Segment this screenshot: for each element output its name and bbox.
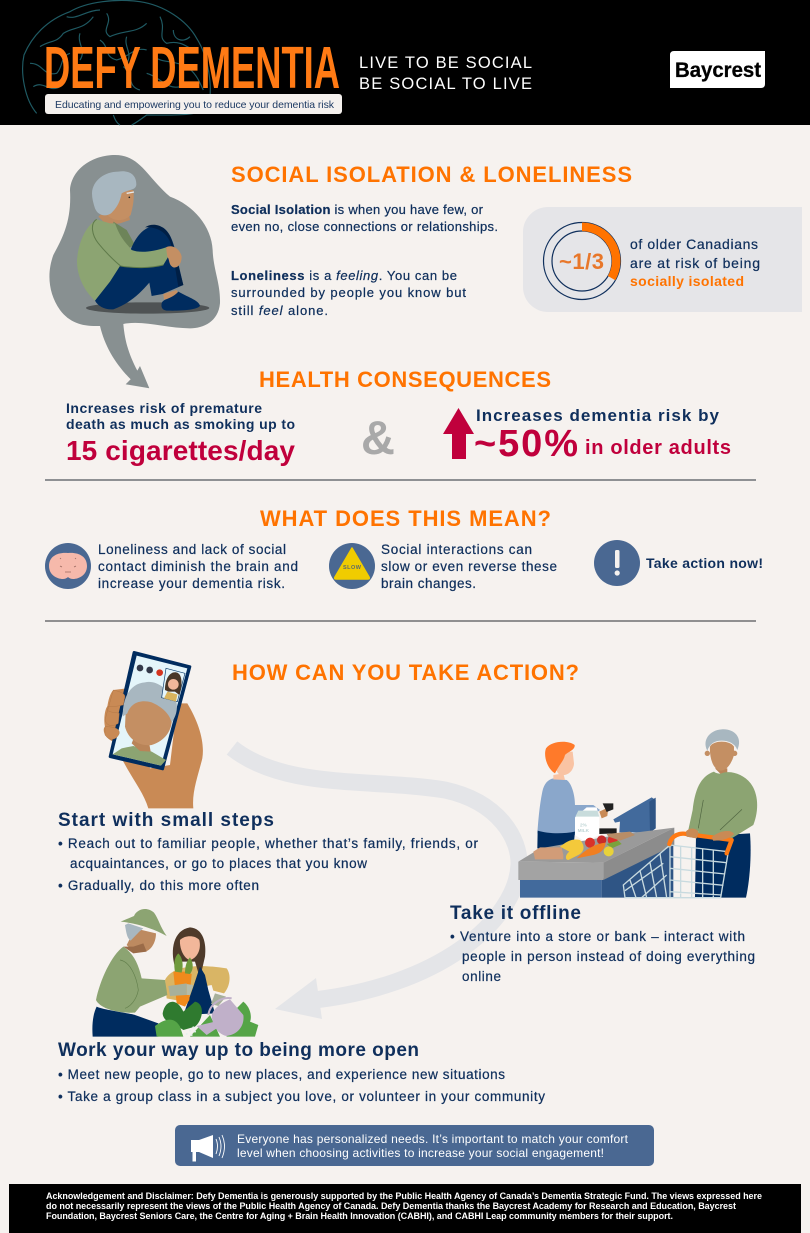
step 1: start with small steps: Start with small steps	[58, 810, 274, 831]
icon: slow sign: SLOW	[343, 565, 362, 571]
meaning 3	[594, 540, 763, 586]
step 2: take it offline: • Venture into a store or bank – interact with	[450, 929, 745, 944]
donut: one third: ~1/3	[559, 249, 604, 274]
step 3: work your way up: • Meet new people, go to new places, and experience new situations	[58, 1067, 505, 1082]
definitions text: surrounded by people you know but	[231, 285, 466, 300]
consequence: premature death: 15 cigarettes/day	[66, 435, 295, 466]
icon: exclamation	[594, 540, 640, 586]
text: Social interactions can	[381, 542, 532, 557]
slogan: LIVE TO BE SOCIAL	[359, 54, 532, 72]
footer: acknowledgement and disclaimer: do not necessarily represent the views of the Public Health Agency of Canada. Defy Dementia thanks the Baycrest Academy for Research and Education, Baycrest	[46, 1201, 736, 1211]
step 2: take it offline: people in person instead of doing everything	[462, 949, 755, 964]
header band	[0, 0, 810, 125]
panel: one third statistic	[523, 207, 802, 312]
arrow: path between steps	[232, 748, 519, 1019]
text	[381, 542, 557, 591]
ampersand: &	[361, 411, 395, 464]
consequence: dementia risk: ~50%	[474, 423, 578, 465]
footer: acknowledgement and disclaimer: Acknowledgement and Disclaimer: Defy Dementia is generously supported by the Public Health Agency of Canada’s Dementia Strategic Fund. The views expressed here	[46, 1191, 762, 1201]
text	[98, 542, 298, 591]
step 2: take it offline	[450, 903, 755, 984]
text: Loneliness and lack of social	[98, 542, 286, 557]
consequence: premature death: Increases risk of premature	[66, 400, 262, 416]
statistic text	[630, 236, 760, 289]
slogan	[359, 54, 532, 93]
slogan: BE SOCIAL TO LIVE	[359, 75, 532, 93]
step 3: work your way up: Work your way up to being more open	[58, 1040, 419, 1061]
consequence: premature death	[66, 400, 295, 466]
title: DEFY DEMENTIA	[44, 35, 340, 101]
icon: brain outline	[23, 0, 210, 125]
illustration: checkout at store	[518, 729, 757, 898]
callout text: level when choosing activities to increase your social engagement!	[237, 1146, 604, 1160]
text: contact diminish the brain and	[98, 559, 298, 574]
heading: health consequences: HEALTH CONSEQUENCES	[259, 367, 551, 392]
consequence: premature death: death as much as smoking up to	[66, 416, 295, 432]
step 3: work your way up	[58, 1040, 545, 1104]
meaning 1	[45, 542, 298, 591]
step 1: start with small steps: acquaintances, or go to places that you know	[70, 856, 367, 871]
heading: how can you take action: HOW CAN YOU TAKE ACTION?	[232, 660, 579, 685]
illustration: isolated person in grey blob with arrow	[49, 155, 220, 388]
text: increase your dementia risk.	[98, 576, 285, 591]
statistic text: of older Canadians	[630, 236, 758, 252]
icon: megaphone	[191, 1135, 224, 1162]
tagline pill	[45, 94, 342, 114]
text: Take action now!	[646, 555, 763, 571]
illustration: gardening together	[92, 909, 258, 1037]
text: brain changes.	[381, 576, 476, 591]
icon: up arrow	[443, 408, 474, 459]
illustration: checkout at store: MILK	[578, 828, 590, 833]
heading: what does this mean: WHAT DOES THIS MEAN?	[260, 506, 551, 531]
icon: brain	[45, 543, 91, 589]
icon: slow sign	[329, 543, 375, 589]
footer: acknowledgement and disclaimer: Foundation, Baycrest Seniors Care, the Centre for Aging + Brain Health Innovation (CABHI), and CABHI Leap community members for their support.	[46, 1211, 673, 1221]
consequence: dementia risk: in older adults	[585, 437, 731, 459]
illustration: video call on phone	[104, 652, 203, 808]
step 3: work your way up: • Take a group class in a subject you love, or volunteer in your community	[58, 1089, 545, 1104]
statistic text: socially isolated	[630, 273, 744, 289]
callout text	[237, 1132, 629, 1160]
footer: acknowledgement and disclaimer	[9, 1184, 801, 1233]
statistic text: are at risk of being	[630, 255, 760, 271]
meaning 2	[329, 542, 557, 591]
tagline pill: Educating and empowering you to reduce your dementia risk	[55, 99, 335, 111]
text: slow or even reverse these	[381, 559, 557, 574]
step 1: start with small steps	[58, 810, 478, 893]
Baycrest logo: Baycrest	[675, 58, 761, 82]
consequence: dementia risk	[474, 406, 731, 465]
step 1: start with small steps: • Reach out to familiar people, whether that’s family, friends, or	[58, 836, 478, 851]
step 2: take it offline: Take it offline	[450, 903, 581, 924]
definitions text	[231, 202, 498, 318]
definitions text: even no, close connections or relationships.	[231, 219, 498, 234]
definitions text: still feel alone.	[231, 303, 328, 318]
step 1: start with small steps: • Gradually, do this more often	[58, 878, 259, 893]
definitions text: Social Isolation is when you have few, or	[231, 202, 484, 217]
donut: one third	[544, 222, 620, 300]
definitions text: Loneliness is a feeling. You can be	[231, 268, 457, 283]
Baycrest logo	[670, 51, 765, 88]
consequence: dementia risk: Increases dementia risk by	[476, 406, 720, 425]
step 2: take it offline: online	[462, 969, 501, 984]
callout: personalized needs	[175, 1125, 654, 1166]
heading: social isolation and loneliness: SOCIAL ISOLATION & LONELINESS	[231, 162, 632, 187]
callout text: Everyone has personalized needs. It’s important to match your comfort	[237, 1132, 629, 1146]
illustration: checkout at store: 2%	[580, 823, 588, 828]
